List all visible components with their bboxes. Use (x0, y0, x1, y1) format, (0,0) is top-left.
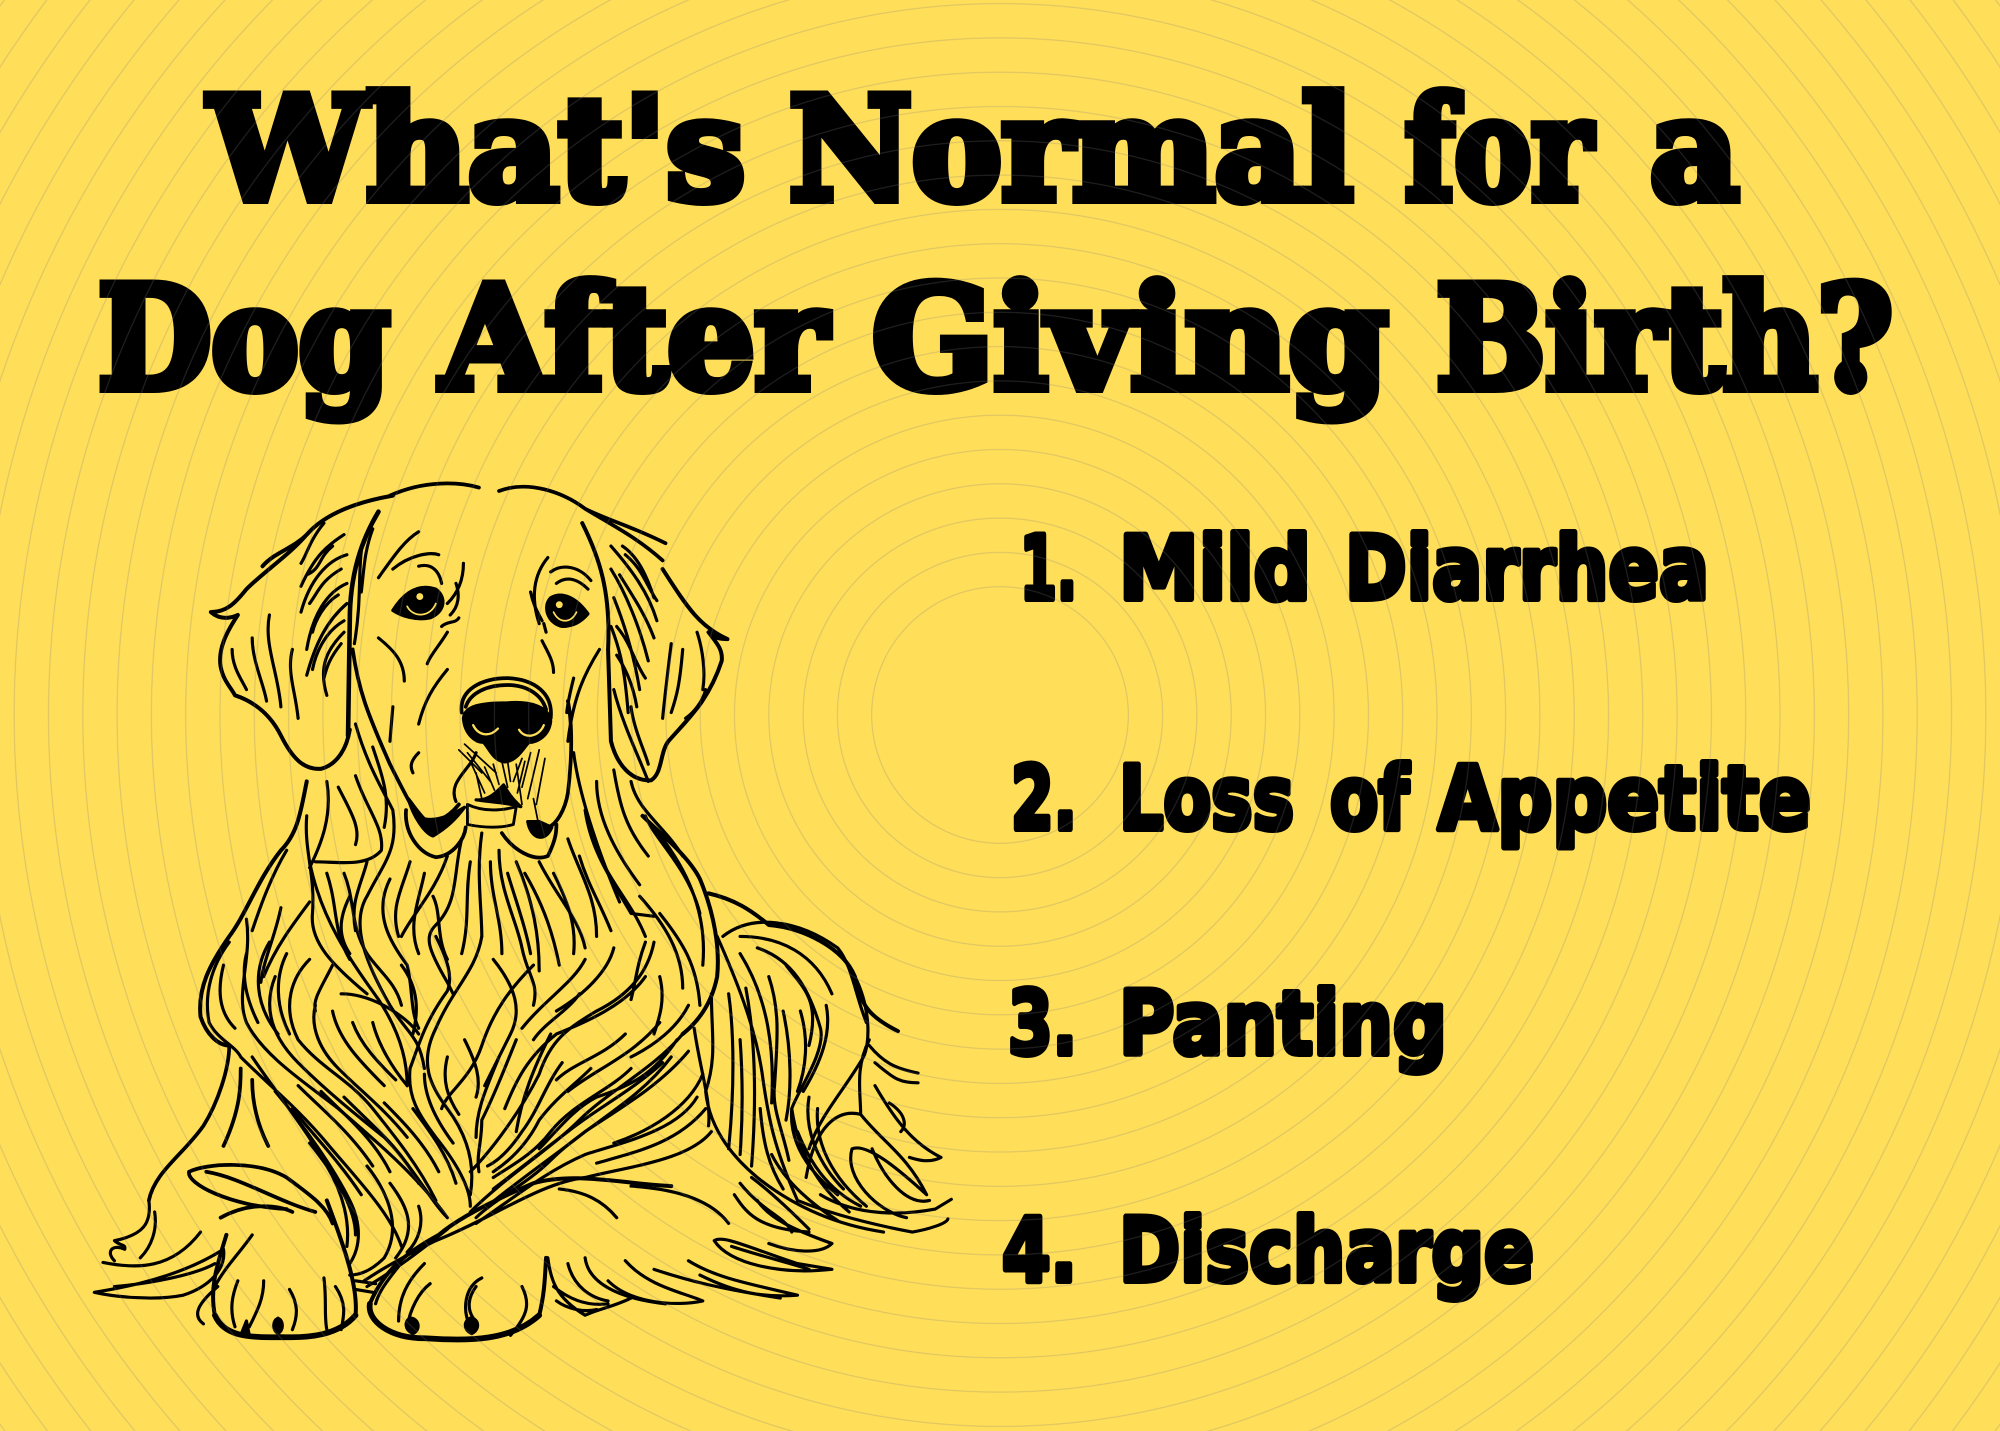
title: Dog (98, 256, 390, 422)
list item 1 (1020, 517, 1709, 620)
dog front paws (213, 1178, 729, 1339)
title: Normal (789, 67, 1353, 233)
illustration: golden retriever lying down (94, 483, 951, 1339)
list item 1: Diarrhea (1345, 517, 1709, 620)
list item 1: 1. (1020, 517, 1077, 620)
list item 2: 2. (1011, 747, 1077, 850)
list item 2: Appetite (1438, 747, 1811, 850)
list item 2: Loss (1119, 747, 1294, 850)
list item 4: 4. (1002, 1199, 1077, 1302)
list item 3: 3. (1008, 972, 1077, 1075)
dog head outline and face lines (353, 483, 665, 827)
dog eyes (393, 587, 588, 626)
title: What's (207, 67, 745, 233)
list item 2 (1011, 747, 1811, 850)
title: for (1405, 67, 1594, 233)
dog body and tail fur (548, 893, 951, 1315)
dog ears (211, 496, 727, 781)
dog nose and mouth (406, 678, 556, 858)
list item 4 (1002, 1199, 1534, 1302)
dog front leg (94, 1045, 333, 1324)
title: After (439, 256, 829, 422)
list item 3 (1008, 972, 1447, 1075)
title (98, 67, 1893, 422)
list item 4: Discharge (1119, 1199, 1534, 1302)
list item 3: Panting (1119, 972, 1447, 1075)
list item 1: Mild (1119, 517, 1311, 620)
dog neck and chest fur (200, 724, 718, 1292)
title: Giving (872, 256, 1388, 422)
title: a (1650, 67, 1739, 233)
list item 2: of (1330, 747, 1410, 850)
title: Birth? (1436, 256, 1893, 422)
